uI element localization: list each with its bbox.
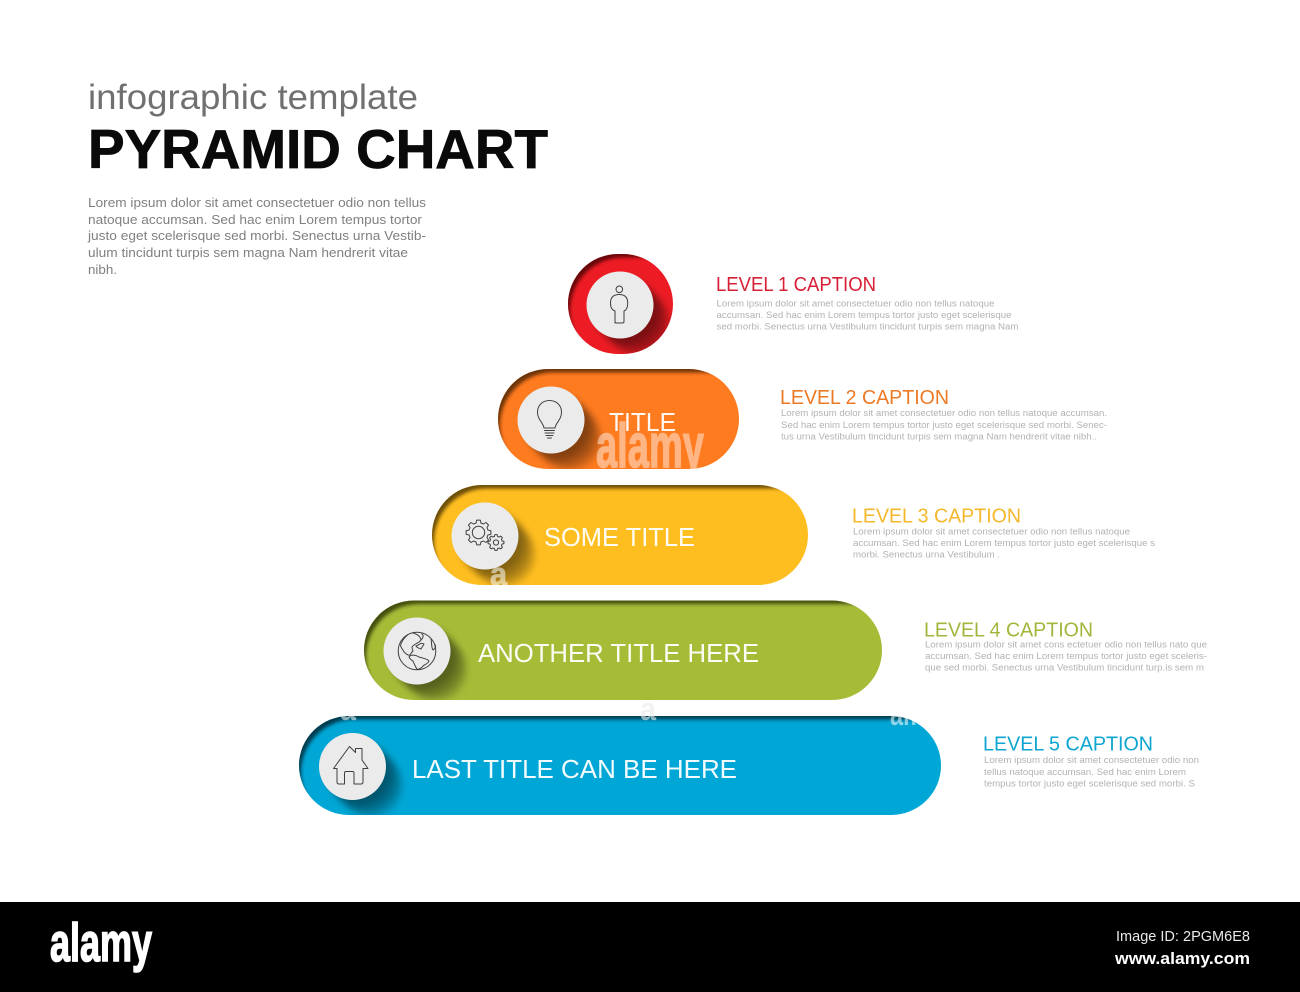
- icon: gears: [452, 502, 518, 570]
- watermark fragments: am: [890, 696, 924, 732]
- caption: level 2: Lorem ipsum dolor sit amet consectetuer odio non tellus natoque accumsan.: [781, 408, 1107, 419]
- intro paragraph: [87, 195, 427, 277]
- watermark: alamy: [596, 412, 704, 481]
- caption: level 5: [983, 734, 1199, 790]
- caption: level 1: [716, 274, 1019, 332]
- caption: level 5: LEVEL 5 CAPTION: [983, 734, 1153, 756]
- intro paragraph: natoque accumsan. Sed hac enim Lorem tempus tortor: [88, 212, 423, 227]
- caption: level 1: accumsan. Sed hac enim Lorem tempus tortor justo eget scelerisque: [716, 310, 1012, 321]
- caption: level 5: tempus tortor justo eget scelerisque sed morbi. S: [984, 778, 1195, 790]
- panel: level 5 bar: [299, 716, 941, 815]
- watermark fragments: a: [640, 691, 656, 727]
- title: TITLE: TITLE: [609, 407, 676, 437]
- caption: level 2: LEVEL 2 CAPTION: [780, 387, 949, 409]
- icon: person: [586, 272, 654, 338]
- caption: level 5: Lorem ipsum dolor sit amet consectetuer odio non: [984, 755, 1199, 766]
- caption: level 4: [924, 620, 1207, 674]
- title: LAST TITLE CAN BE HERE: LAST TITLE CAN BE HERE: [412, 754, 737, 784]
- footer bar: [0, 902, 1300, 992]
- watermark fragment: a: [490, 556, 507, 592]
- watermark fragment: a: [640, 691, 656, 727]
- caption: level 4: accumsan. Sed hac enim Lorem tempus tortor justo eget sceleris-: [925, 651, 1207, 662]
- caption: level 4: LEVEL 4 CAPTION: [924, 620, 1093, 642]
- caption: level 2: [780, 387, 1107, 442]
- panel: level 1 circle: [568, 254, 673, 354]
- panel: level 3 bar: [432, 485, 808, 585]
- title: SOME TITLE: SOME TITLE: [544, 522, 695, 552]
- intro paragraph: Lorem ipsum dolor sit amet consectetuer odio non tellus: [88, 195, 427, 210]
- intro paragraph: justo eget scelerisque sed morbi. Senectus urna Vestib-: [87, 228, 426, 243]
- caption: level 3: [852, 506, 1155, 560]
- watermark fragments: [341, 716, 920, 726]
- caption: level 4: que sed morbi. Senectus urna Vestibulum tincidunt turp.is sem m: [925, 662, 1204, 674]
- caption: level 5: tellus natoque accumsan. Sed hac enim Lorem: [984, 767, 1186, 778]
- watermark fragments: a: [340, 691, 356, 727]
- title: ANOTHER TITLE HERE: ANOTHER TITLE HERE: [478, 638, 759, 668]
- icon: globe: [384, 618, 450, 684]
- image id: Image ID: 2PGM6E8: [1116, 928, 1250, 945]
- caption: level 3: accumsan. Sed hac enim Lorem tempus tortor justo eget scelerisque s: [853, 538, 1155, 549]
- caption: level 1: LEVEL 1 CAPTION: [716, 274, 876, 296]
- intro paragraph: ulum tincidunt turpis sem magna Nam hendrerit vitae: [88, 245, 408, 260]
- icon: house: [319, 733, 386, 800]
- panel: level 2 bar: [498, 369, 739, 469]
- website: www.alamy.com: [1114, 949, 1250, 968]
- caption: level 4: Lorem ipsum dolor sit amet cons ectetuer odio non tellus nato que: [925, 640, 1207, 650]
- caption: level 3: LEVEL 3 CAPTION: [852, 506, 1021, 528]
- caption: level 3: Lorem ipsum dolor sit amet consectetuer odio non tellus natoque: [853, 526, 1130, 538]
- footer logo: alamy: [50, 913, 152, 973]
- watermark fragment between bars: a: [640, 691, 656, 727]
- subtitle: infographic template: [88, 78, 418, 117]
- icon: light bulb: [518, 386, 584, 454]
- intro paragraph: nibh.: [88, 262, 117, 277]
- caption: level 3: morbi. Senectus urna Vestibulum .: [853, 550, 1000, 560]
- panel: level 4 bar: [364, 600, 882, 700]
- caption: level 1: Lorem ipsum dolor sit amet consectetuer odio non tellus natoque: [716, 298, 994, 310]
- title: PYRAMID CHART: [88, 118, 548, 180]
- caption: level 1: sed morbi. Senectus urna Vestibulum tincidunt turpis sem magna Nam: [716, 322, 1019, 332]
- caption: level 2: Sed hac enim Lorem tempus tortor justo eget scelerisque sed morbi. Senec-: [781, 420, 1107, 431]
- caption: level 2: tus urna Vestibulum tincidunt turpis sem magna Nam hendrerit vitae nibh..: [781, 432, 1097, 442]
